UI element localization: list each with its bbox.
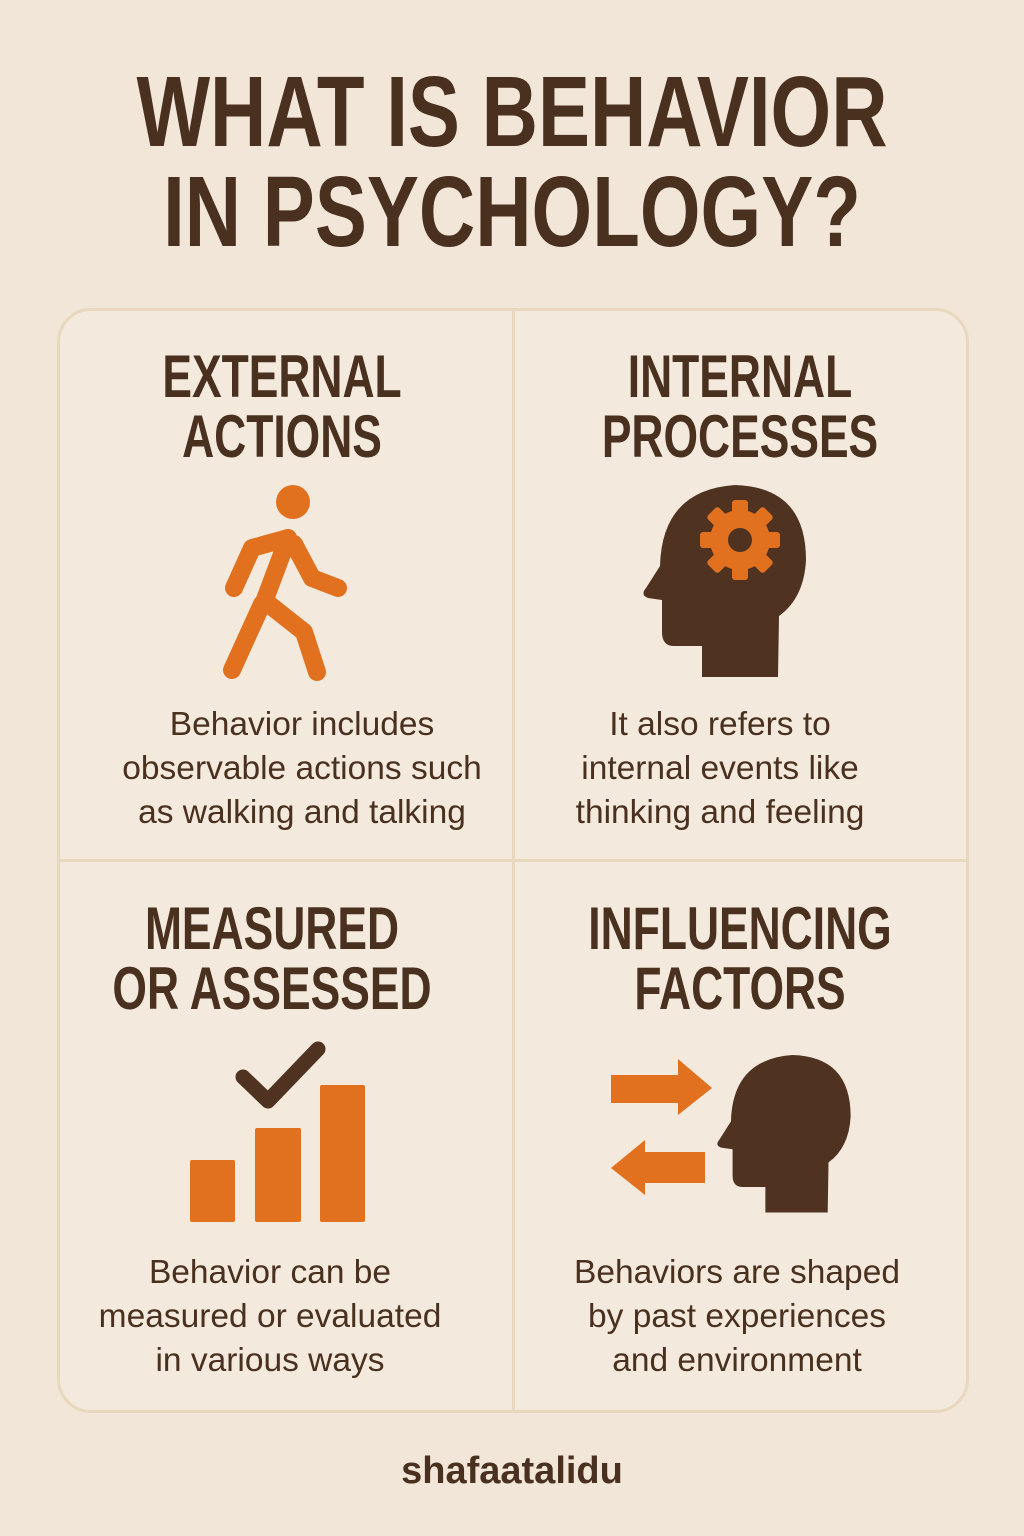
- icon: bar chart with check: [190, 1049, 365, 1222]
- body: external: [122, 706, 482, 831]
- body: external: as walking and talking: [138, 794, 466, 831]
- title: IN PSYCHOLOGY?: [163, 156, 861, 268]
- body: internal: thinking and feeling: [576, 794, 864, 831]
- body: measured: measured or evaluated: [99, 1298, 441, 1335]
- heading: internal processes: INTERNAL: [628, 343, 852, 410]
- heading: influencing: INFLUENCING: [588, 895, 892, 962]
- heading: measured: OR ASSESSED: [112, 955, 432, 1022]
- heading: measured: [112, 895, 432, 1022]
- body: influencing: and environment: [612, 1342, 862, 1379]
- icon: head with gear: [643, 485, 806, 677]
- panel grid: [57, 308, 969, 1413]
- heading: influencing: FACTORS: [634, 955, 846, 1022]
- body: external: Behavior includes: [170, 706, 434, 743]
- icon: walking person: [232, 485, 338, 672]
- body: influencing: [574, 1254, 900, 1379]
- body: influencing: Behaviors are shaped: [574, 1254, 900, 1291]
- heading: measured: MEASURED: [145, 895, 399, 962]
- panel: measured: [99, 895, 441, 1379]
- heading: internal processes: [602, 343, 878, 470]
- title: WHAT IS BEHAVIOR: [136, 56, 888, 168]
- body: influencing: by past experiences: [588, 1298, 886, 1335]
- heading: influencing: [588, 895, 892, 1022]
- panel: internal processes: [576, 343, 878, 831]
- body: internal: It also refers to: [609, 706, 831, 743]
- heading: internal processes: PROCESSES: [602, 403, 878, 470]
- body: measured: [99, 1254, 441, 1379]
- body: measured: Behavior can be: [149, 1254, 391, 1291]
- body: measured: in various ways: [155, 1342, 384, 1379]
- body: internal: [576, 706, 864, 831]
- title: [136, 56, 888, 268]
- heading: external actions: EXTERNAL: [162, 343, 402, 410]
- body: external: observable actions such: [122, 750, 482, 787]
- panel: external actions: [122, 343, 482, 831]
- panel: influencing: [574, 895, 900, 1379]
- heading: external actions: ACTIONS: [182, 403, 382, 470]
- heading: external actions: [162, 343, 402, 470]
- icon: arrows and head: [611, 1055, 851, 1212]
- body: internal: internal events like: [581, 750, 859, 787]
- footer: shafaatalidu: [401, 1450, 623, 1492]
